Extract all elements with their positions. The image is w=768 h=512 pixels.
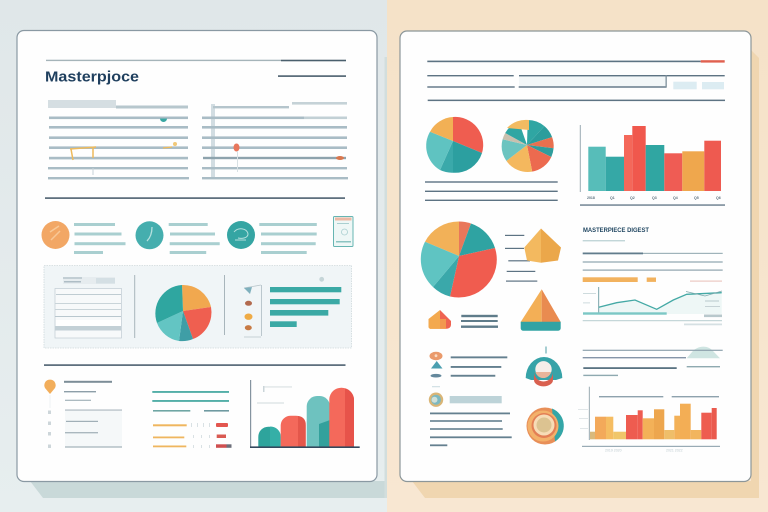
text lines under pies (425, 181, 558, 201)
table: left text rows (48, 100, 189, 179)
text lines: section intro (583, 240, 723, 282)
text lines: group three (259, 223, 317, 254)
legend rows (152, 391, 232, 448)
bar list (270, 287, 341, 327)
text lines: lower right intro (583, 347, 723, 376)
bar chart: lower: 2021 2022 (666, 448, 683, 452)
panel: right document (400, 31, 751, 482)
divider: second (224, 275, 225, 335)
bar chart: upper: Q2 (630, 196, 635, 200)
bar chart: upper: Q5 (694, 196, 699, 200)
pie chart: first (426, 117, 483, 173)
text lines: group one (74, 223, 126, 254)
pie chart: summary (155, 285, 211, 341)
heading: right section: MASTERPIECE DIGEST (583, 227, 649, 234)
pie chart: large (421, 221, 497, 298)
table: right text rows (202, 102, 348, 179)
icon: teal circle (136, 221, 164, 249)
bar chart: upper (580, 125, 725, 206)
icon: marker stack (430, 352, 442, 387)
text lines: group two (169, 223, 220, 254)
bar chart: lower (578, 387, 720, 452)
marker dot (319, 277, 324, 282)
text lines beside house (461, 315, 498, 328)
bar chart: upper: Q1 (610, 196, 615, 200)
bar chart: upper: Q4 (673, 196, 678, 200)
icon: pentagon (524, 228, 561, 263)
header rules (46, 60, 346, 77)
icon: document (334, 216, 353, 246)
pie chart: second (502, 120, 554, 172)
divider: first (134, 275, 135, 338)
text lines: paragraph (430, 412, 512, 446)
icon: ring badge (429, 392, 443, 407)
divider (44, 364, 346, 366)
bar chart: lower: 2019 2020 (605, 448, 622, 452)
icon column (244, 285, 262, 337)
icon: dome (526, 346, 562, 386)
icon: spiral disc (526, 408, 564, 444)
bar chart: upper: 2018 (587, 196, 595, 200)
form table (55, 277, 122, 338)
divider (45, 197, 345, 199)
label block (450, 396, 502, 403)
text lines: marker notes (451, 356, 507, 377)
icon: orange circle (42, 221, 70, 249)
panel: left document (17, 30, 377, 482)
text lines beside pie (505, 235, 537, 282)
panel: summary strip (44, 266, 352, 348)
icon: cone (521, 289, 561, 331)
icon: teal circle with map (227, 221, 255, 249)
line chart (583, 287, 722, 325)
bar chart: rounded bars (250, 380, 360, 448)
icon: small house (428, 310, 451, 329)
list: pin and notes (44, 380, 122, 448)
header rules (427, 60, 725, 101)
bar chart: upper: Q6 (716, 196, 721, 200)
title: Masterpjoce (45, 70, 139, 86)
bar chart: upper: Q3 (652, 196, 657, 200)
